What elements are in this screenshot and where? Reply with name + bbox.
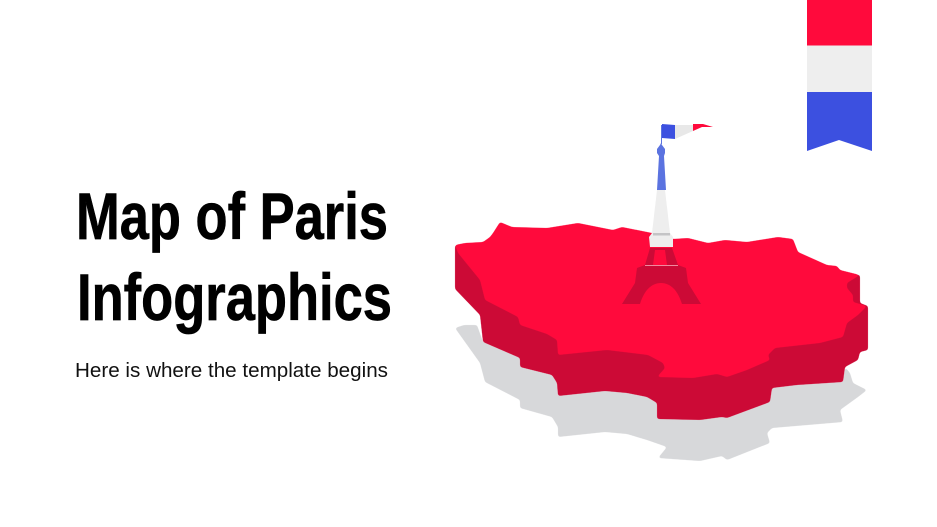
tower lower legs bbox=[622, 248, 701, 304]
map of Paris bbox=[455, 222, 868, 420]
subtitle: Here is where the template begins bbox=[75, 360, 388, 382]
map top bbox=[455, 222, 867, 378]
map shadow bbox=[455, 325, 867, 461]
ribbon: French flag bbox=[807, 0, 872, 151]
title: Map of Paris bbox=[76, 179, 388, 253]
title bbox=[76, 179, 392, 334]
tower platform line bbox=[645, 265, 678, 266]
map side bbox=[455, 245, 868, 420]
tower blue section bbox=[657, 143, 666, 190]
title: Infographics bbox=[77, 260, 392, 334]
flag bbox=[662, 124, 713, 139]
icon: Eiffel tower bbox=[622, 124, 713, 304]
tower white section bbox=[649, 190, 673, 247]
flag pole bbox=[661, 125, 662, 144]
